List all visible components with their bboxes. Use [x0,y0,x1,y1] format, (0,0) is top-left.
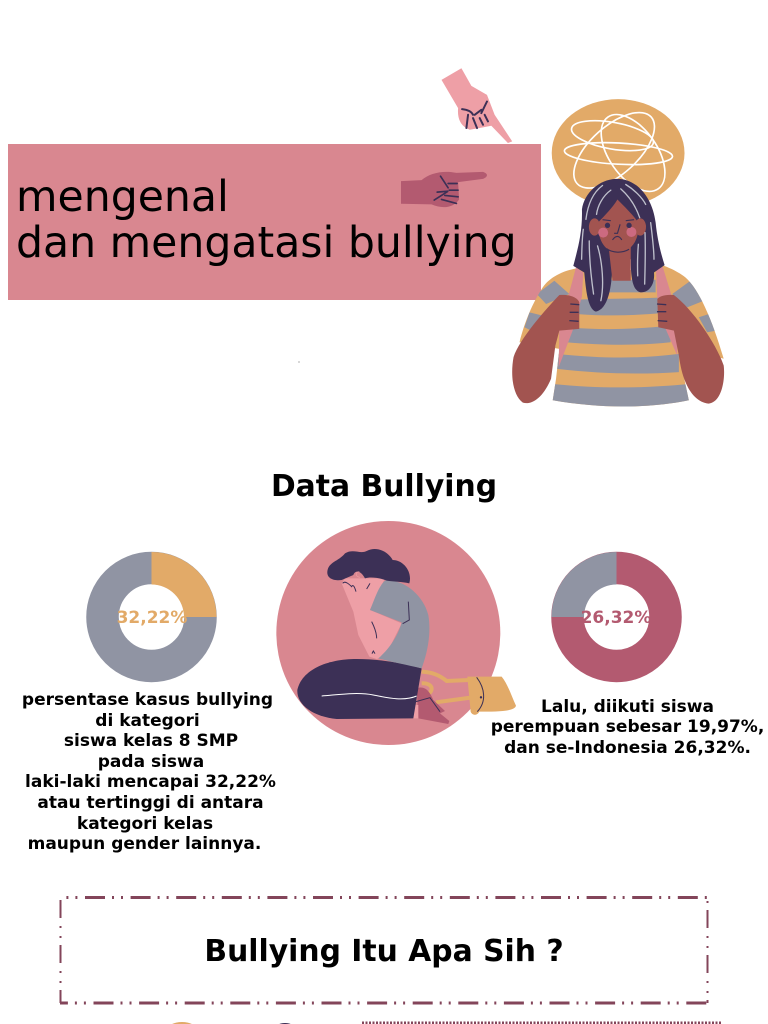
text block: left statistic: di kategori [95,711,200,731]
text block: right statistic: dan se-Indonesia 26,32%. [504,738,751,758]
text block: left statistic: pada siswa [98,752,204,772]
legs [297,659,422,719]
heading: Data Bullying: Data Bullying [271,468,497,504]
bag [467,677,516,715]
title: mengenal [16,172,229,222]
chart label: 32,22% [117,608,187,628]
heading: Bullying Itu Apa Sih: Bullying Itu Apa Sih ? [204,934,564,968]
text block: left statistic: kategori kelas [77,814,213,834]
text block: right statistic [491,696,764,758]
bottom decorative icons [167,361,300,1024]
illustration: sad girl with tangled thoughts [512,99,729,412]
text block: left statistic: atau tertinggi di antara [37,793,264,813]
title: dan mengatasi bullying [16,218,517,268]
text block: left statistic: maupun gender lainnya. [28,834,261,854]
arms and face skin [342,578,402,659]
t-shirt [370,580,429,668]
dotted panel top edge [362,1022,722,1024]
text block: right statistic: Lalu, diikuti siswa [541,696,714,716]
face details [598,220,636,252]
head [589,199,646,253]
text block: left statistic [22,690,276,854]
neck [608,246,631,281]
text block: left statistic: siswa kelas 8 SMP [64,731,238,751]
title [16,172,517,268]
hair [327,549,410,583]
bag straps [422,672,471,702]
text block: right statistic: perempuan sebesar 19,97%, [491,717,764,737]
callout box border [60,897,708,1003]
chart: donut right [552,552,666,666]
hair [573,179,665,312]
foot [417,687,449,724]
text block: left statistic: laki-laki mencapai 32,22% [25,772,276,792]
backpack straps [559,264,677,367]
finger lines [569,304,667,321]
hair highlights [582,184,654,301]
chart label: 26,32% [581,608,651,628]
icon: pointing right hand [401,172,487,207]
thought bubble [552,99,685,207]
chart: donut left [102,552,216,666]
shirt [520,266,724,406]
banner panel [8,144,541,300]
icon: pointing down hand [442,68,512,143]
arms [512,295,579,403]
text block: left statistic: persentase kasus bullying [22,690,273,710]
illustration: crying woman in circle [276,521,516,745]
